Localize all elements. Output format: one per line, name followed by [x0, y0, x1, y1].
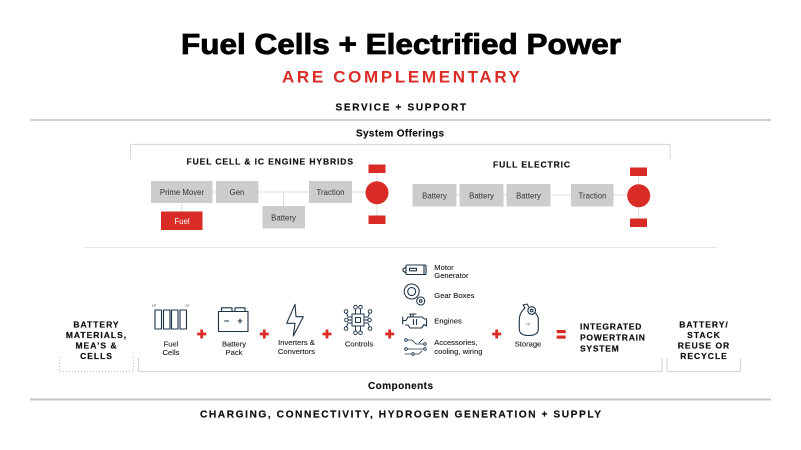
label: gear boxes: Gear Boxes: [434, 291, 475, 300]
system offerings bracket: [130, 144, 670, 159]
panel: full electric: [412, 160, 650, 227]
icon: fuel cells: [152, 303, 190, 329]
label: battery pack: Battery: [222, 340, 246, 349]
icon: accessories wiring: [405, 339, 426, 355]
text: battery stack reuse or recycle: STACK: [687, 330, 721, 340]
heading: service and support: SERVICE + SUPPORT: [336, 102, 466, 113]
box: traction: [309, 181, 352, 203]
text: integrated powertrain system: POWERTRAIN: [580, 333, 646, 343]
label: engines: Engines: [434, 317, 462, 326]
box: battery 1: [412, 184, 456, 206]
box: battery 3: Battery: [516, 192, 541, 200]
subtitle: ARE COMPLEMENTARY: [282, 67, 521, 86]
icon: battery pack: [218, 308, 248, 332]
label: motor generator: Motor: [434, 263, 454, 272]
box: battery 2: [460, 184, 504, 206]
equals: [557, 330, 566, 339]
box: prime mover: Prime Mover: [160, 188, 204, 197]
box: gen: [216, 181, 258, 203]
label: accessories, cooling, wiring: cooling, wiring: [434, 347, 482, 356]
plus: [260, 330, 269, 338]
text: integrated powertrain system: SYSTEM: [580, 344, 619, 354]
text: integrated powertrain system: INTEGRATED: [580, 322, 642, 332]
label: motor generator: Generator: [434, 271, 469, 280]
title: Fuel Cells + Electrified Power: [181, 29, 621, 61]
icon: controls chip: [344, 305, 372, 335]
box: battery 2: Battery: [469, 192, 494, 200]
icon: fuel cells: H²: [152, 303, 157, 308]
box: traction: Traction: [579, 192, 606, 200]
label: inverters and convertors: Inverters &: [278, 338, 315, 347]
box: battery: [262, 206, 305, 228]
box: traction: Traction: [317, 188, 344, 197]
box: battery 3: [506, 184, 550, 206]
label: battery pack: Pack: [226, 348, 243, 357]
heading: full electric: FULL ELECTRIC: [493, 160, 570, 170]
icon: axle and wheel: [627, 168, 650, 227]
label: accessories, cooling, wiring: Accessories,: [434, 338, 477, 347]
heading: system offerings: System Offerings: [356, 128, 444, 140]
text: battery stack reuse or recycle: BATTERY/: [679, 320, 729, 330]
icon: hydrogen storage tank: [519, 304, 538, 336]
text: battery materials: CELLS: [80, 351, 113, 361]
plus: [492, 330, 501, 338]
label: inverters and convertors: Convertors: [278, 347, 315, 356]
plus: [197, 330, 206, 338]
box: gen: Gen: [230, 188, 244, 197]
label: fuel cells: Cells: [163, 348, 180, 357]
components bracket: [138, 358, 662, 372]
box: traction: [571, 184, 614, 206]
text: battery materials: MEA'S &: [75, 340, 118, 350]
text: battery stack reuse or recycle: REUSE OR: [678, 340, 730, 350]
icon: lightning bolt: [287, 304, 303, 336]
icon: axle and wheel: [366, 164, 388, 224]
icon: hydrogen storage tank: H²: [526, 322, 531, 326]
label: controls: Controls: [345, 340, 373, 349]
box: battery: Battery: [271, 214, 296, 222]
panel: fuel cell and IC engine hybrids: [151, 156, 388, 230]
heading: charging, connectivity, hydrogen: CHARGING, CONNECTIVITY, HYDROGEN GENERATION + SUPPLY: [200, 410, 601, 421]
box: fuel: [161, 212, 202, 230]
text: battery stack reuse or recycle: RECYCLE: [680, 351, 728, 361]
plus: [385, 330, 394, 338]
label: storage: Storage: [515, 340, 541, 349]
box: prime mover: [151, 181, 212, 203]
box: battery 1: Battery: [422, 192, 447, 200]
text: battery materials: MATERIALS,: [66, 330, 127, 340]
icon: engines: [403, 314, 426, 328]
box: fuel: Fuel: [174, 217, 190, 226]
icon: gear boxes: [404, 284, 425, 305]
heading: hybrids: FUEL CELL & IC ENGINE HYBRIDS: [186, 156, 353, 166]
heading: components: Components: [368, 381, 433, 392]
recycle bracket: [667, 358, 740, 372]
text: battery materials: BATTERY: [73, 320, 120, 330]
plus: [322, 330, 332, 338]
icon: fuel cells: O²: [185, 303, 190, 308]
icon: motor generator: [403, 265, 426, 274]
dotted bracket: battery materials: [60, 357, 134, 372]
label: fuel cells: Fuel: [164, 340, 179, 349]
